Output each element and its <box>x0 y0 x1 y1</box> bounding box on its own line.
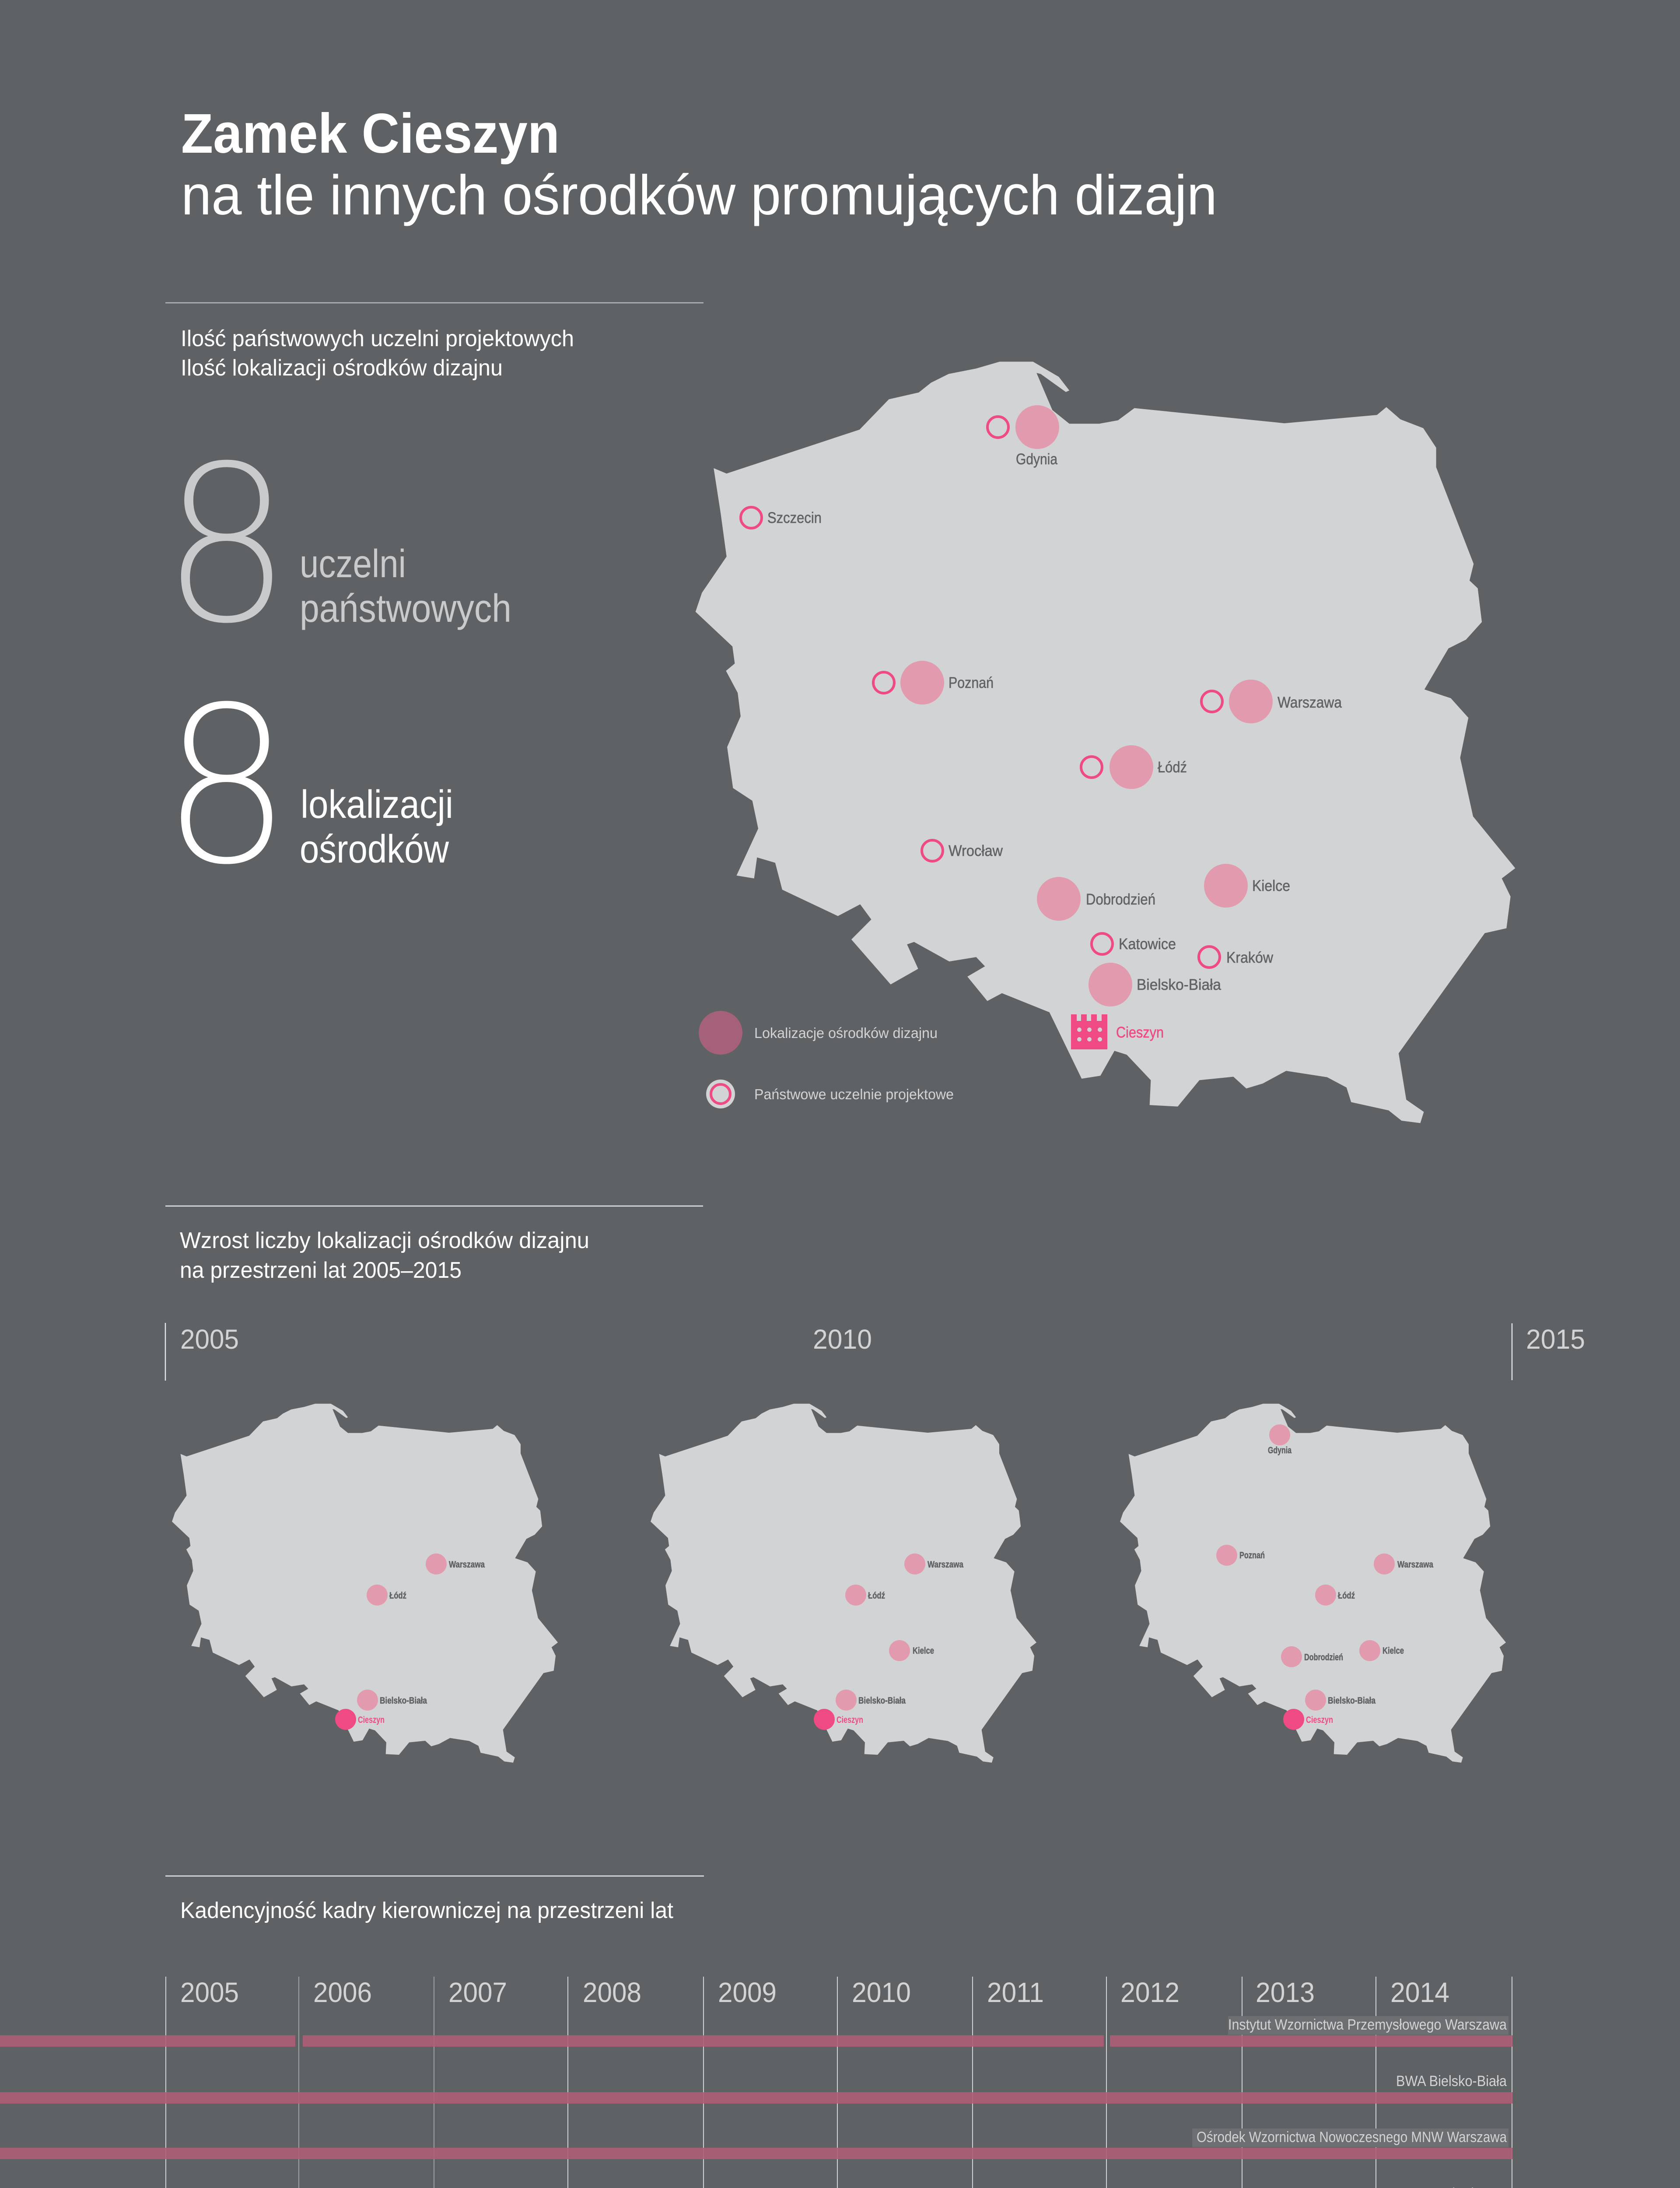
panel: map 2015 <box>1120 1323 1585 1763</box>
design centres markers <box>900 405 1273 1006</box>
year labels: 2007 <box>448 1977 507 2008</box>
city labels: Wrocław <box>948 842 1003 859</box>
city labels <box>767 451 1342 1041</box>
heading: growth: Wzrost liczby lokalizacji ośrodków dizajnu <box>180 1228 589 1253</box>
label: uczelni państwowych <box>300 542 511 631</box>
label: lokalizacji ośrodków: ośrodków <box>300 828 449 871</box>
map legend: Lokalizacje ośrodków dizajnu <box>754 1025 938 1041</box>
markers 2015 <box>1216 1424 1433 1730</box>
tenure bars <box>0 2035 1512 2188</box>
city labels: Cieszyn <box>1116 1024 1164 1041</box>
markers 2010: Cieszyn <box>836 1715 863 1725</box>
label: lokalizacji ośrodków: lokalizacji <box>301 783 453 827</box>
markers 2010 <box>814 1553 963 1730</box>
city labels: Bielsko-Biała <box>1137 976 1222 993</box>
year 2010: 2010 <box>813 1324 872 1355</box>
row labels <box>1197 2016 1507 2188</box>
map legend: Państwowe uczelnie projektowe <box>754 1086 954 1102</box>
panel: map 2005 <box>165 1323 558 1763</box>
map outline 2015 <box>1120 1404 1506 1763</box>
title <box>181 102 1217 227</box>
panel: map 2010 <box>651 1324 1036 1763</box>
year labels: 2014 <box>1390 1977 1449 2008</box>
markers 2010: Bielsko-Biała <box>858 1696 906 1706</box>
year labels: 2008 <box>583 1977 641 2008</box>
label: lokalizacji ośrodków <box>300 783 453 871</box>
title: na tle innych ośrodków promujących dizajn <box>181 164 1217 227</box>
heading: growth: na przestrzeni lat 2005–2015 <box>180 1258 462 1283</box>
row labels: Instytut Wzornictwa Przemysłowego Warszawa <box>1228 2016 1507 2033</box>
city labels: Łódź <box>1158 759 1187 776</box>
label: uczelni państwowych: państwowych <box>300 587 511 631</box>
year labels: 2010 <box>852 1977 911 2008</box>
heading: tenure: Kadencyjność kadry kierowniczej na przestrzeni lat <box>180 1898 674 1923</box>
markers 2015: Cieszyn <box>1306 1715 1333 1725</box>
number: uczelnie: 8 <box>161 419 292 672</box>
year labels: 2012 <box>1120 1977 1180 2008</box>
city labels: Kielce <box>1252 877 1290 894</box>
markers 2005: Warszawa <box>449 1560 485 1570</box>
city labels: Dobrodzień <box>1086 891 1155 908</box>
icon: castle Cieszyn <box>1071 1014 1107 1049</box>
markers 2005: Cieszyn <box>358 1715 385 1725</box>
markers 2015: Poznań <box>1239 1550 1265 1560</box>
label highlights <box>1192 2016 1508 2188</box>
markers 2015: Kielce <box>1382 1646 1404 1656</box>
year labels <box>180 1977 1449 2008</box>
year 2015: 2015 <box>1526 1324 1585 1355</box>
heading: counts <box>181 326 574 381</box>
year labels: 2006 <box>313 1977 372 2008</box>
row labels: BWA Bielsko-Biała <box>1396 2073 1507 2090</box>
city labels: Warszawa <box>1278 694 1342 711</box>
map: Poland main <box>696 362 1515 1123</box>
city labels: Kraków <box>1226 949 1274 966</box>
year labels: 2013 <box>1256 1977 1315 2008</box>
heading: counts: Ilość państwowych uczelni projektowych <box>181 326 574 351</box>
label: uczelni państwowych: uczelni <box>300 542 406 586</box>
markers 2010: Łódź <box>868 1591 885 1601</box>
markers 2005: Bielsko-Biała <box>380 1696 427 1706</box>
city labels: Szczecin <box>767 509 822 526</box>
markers 2005 <box>335 1553 485 1730</box>
year labels: 2009 <box>718 1977 777 2008</box>
number: lokalizacje: 8 <box>161 660 292 913</box>
map legend <box>699 1011 954 1108</box>
city labels: Gdynia <box>1016 451 1057 468</box>
map outline 2010 <box>651 1404 1036 1763</box>
markers 2015: Bielsko-Biała <box>1328 1696 1376 1706</box>
chart: tenure timeline <box>0 1977 1512 2188</box>
markers 2015: Gdynia <box>1268 1445 1292 1455</box>
universities markers <box>741 417 1222 968</box>
markers 2015: Warszawa <box>1397 1560 1433 1570</box>
year labels: 2005 <box>180 1977 239 2008</box>
city labels: Poznań <box>948 674 994 691</box>
markers 2010: Kielce <box>913 1646 934 1656</box>
heading: counts: Ilość lokalizacji ośrodków dizajnu <box>181 355 503 381</box>
panel: counts <box>161 326 574 913</box>
city labels: Katowice <box>1119 936 1176 953</box>
markers 2015: Łódź <box>1338 1591 1355 1601</box>
heading: growth <box>180 1228 589 1283</box>
year 2005: 2005 <box>180 1324 239 1355</box>
markers 2005: Łódź <box>389 1591 406 1601</box>
markers 2010: Warszawa <box>928 1560 963 1570</box>
markers 2015: Dobrodzień <box>1304 1652 1343 1662</box>
title: Zamek Cieszyn <box>181 102 560 165</box>
row labels: Ośrodek Wzornictwa Nowoczesnego MNW Warszawa <box>1197 2129 1507 2146</box>
year labels: 2011 <box>987 1977 1044 2008</box>
map outline 2005 <box>172 1404 558 1763</box>
